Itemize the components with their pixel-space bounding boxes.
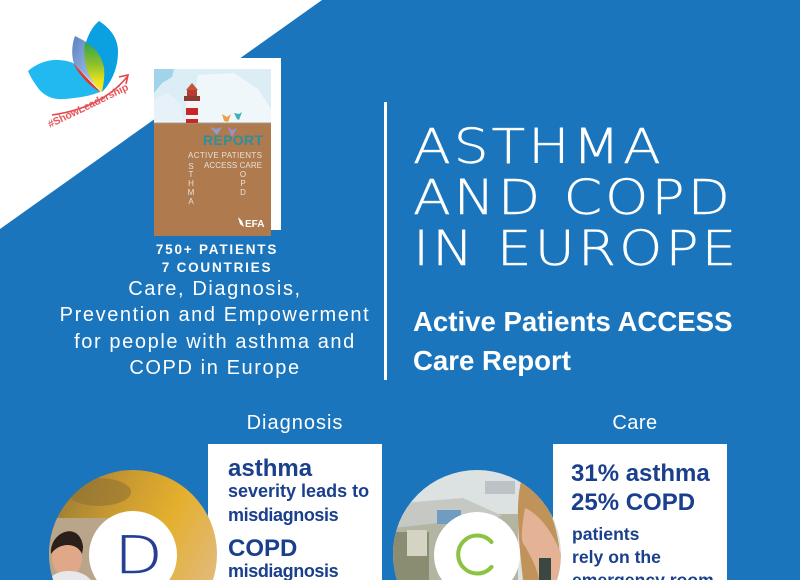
report cover: [154, 69, 271, 236]
asthma label: asthma: [228, 455, 312, 482]
title: IN EUROPE: [413, 221, 739, 277]
woman photo: [518, 482, 561, 580]
lighthouse: [184, 83, 200, 123]
photo circle: care: [393, 470, 561, 580]
title: AND COPD: [413, 170, 733, 226]
photo circle: diagnosis: [49, 470, 217, 580]
title: [413, 119, 739, 277]
asthma misdiagnosis text: misdiagnosis: [228, 504, 338, 524]
report description: for people with asthma and: [74, 331, 356, 353]
cover text: M: [188, 188, 195, 197]
panel: care text: [553, 444, 727, 580]
report description: Prevention and Empowerment: [60, 304, 370, 326]
cover text: T: [189, 170, 194, 179]
letter C: [458, 536, 492, 574]
cover text: O: [240, 170, 246, 179]
report description: [60, 278, 370, 379]
care description: [572, 524, 714, 580]
white corner triangle: [0, 0, 322, 229]
cover text: A: [188, 197, 194, 206]
cover text: D: [240, 188, 246, 197]
asthma misdiagnosis text: [228, 481, 369, 525]
patients stat: 7 COUNTRIES: [162, 260, 272, 275]
cover text: EFA: [245, 219, 264, 230]
cover text: [188, 132, 264, 230]
COPD label: COPD: [228, 535, 297, 562]
subtitle: [413, 306, 732, 376]
care percentages: 25% COPD: [571, 489, 695, 516]
care percentages: 31% asthma: [571, 460, 710, 487]
patients stat: 750+ PATIENTS: [156, 242, 278, 257]
panel: diagnosis text: [208, 444, 382, 580]
care percentages: [571, 460, 710, 516]
child photo: [49, 531, 91, 580]
birds: [210, 112, 242, 137]
cover text: P: [240, 179, 246, 188]
report description: COPD in Europe: [129, 357, 301, 379]
cover text: H: [188, 179, 194, 188]
title: ASTHMA: [413, 119, 664, 175]
heading: Diagnosis: Diagnosis: [247, 412, 343, 434]
cover text: ACTIVE PATIENTS: [188, 151, 262, 160]
subtitle: Care Report: [413, 345, 571, 376]
cover text: ACCESS CARE: [204, 161, 262, 170]
vertical divider: [384, 102, 387, 380]
heading: Care: Care: [612, 412, 658, 434]
icon: ShowLeadership logo: [28, 21, 130, 131]
white panel behind report cover: [170, 58, 281, 230]
asthma misdiagnosis text: severity leads to: [228, 481, 369, 501]
care description: rely on the: [572, 547, 661, 567]
care description: patients: [572, 524, 639, 544]
patients stat: [156, 242, 278, 275]
subtitle: Active Patients ACCESS: [413, 306, 732, 337]
logo hashtag: #ShowLeadership: [46, 81, 130, 131]
cover text: S: [188, 162, 194, 171]
cover text: REPORT: [203, 132, 263, 148]
report description: Care, Diagnosis,: [128, 278, 302, 300]
